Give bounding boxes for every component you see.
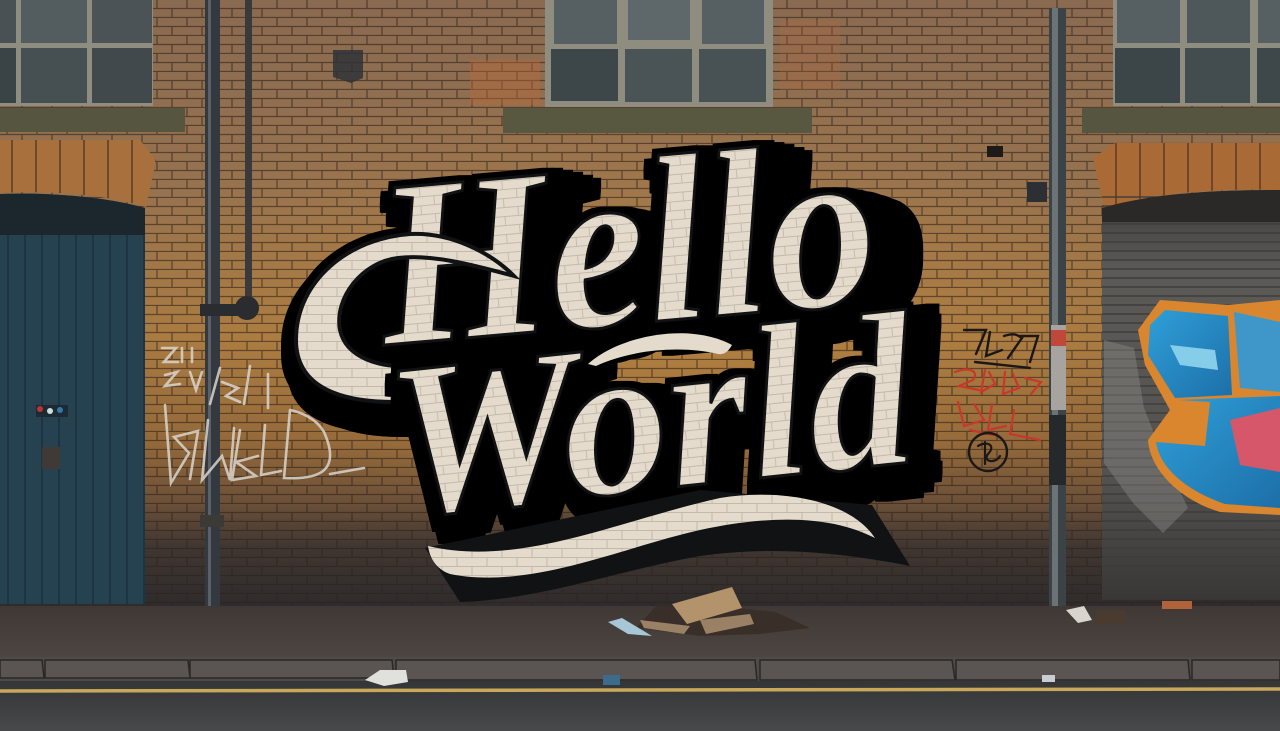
drainpipe: left — [200, 0, 259, 620]
window: top left — [0, 0, 153, 106]
red and black graffiti tag — [955, 330, 1041, 471]
blue door — [0, 194, 145, 604]
window sill: right — [1082, 108, 1280, 133]
litter — [365, 601, 1192, 686]
brick arch: left — [0, 140, 156, 207]
word: Hello: Hello — [365, 91, 886, 397]
small swash between words — [588, 333, 732, 366]
window: centre — [545, 0, 773, 107]
brick arch: right — [1093, 143, 1280, 208]
underline swash — [425, 490, 910, 602]
drainpipe: right with stickers — [1049, 8, 1066, 612]
mural: Hello World lettering — [296, 91, 927, 602]
word: World: World — [378, 266, 927, 564]
window sill: left — [0, 108, 185, 132]
yellow road line — [0, 689, 1280, 691]
window sill: centre — [503, 108, 812, 133]
pavement — [0, 606, 1280, 661]
roller shutter with graffiti — [1102, 190, 1280, 600]
white graffiti tag — [162, 348, 364, 483]
rubbish pile — [608, 587, 810, 636]
window: top right — [1113, 0, 1280, 106]
kerb — [0, 657, 1280, 681]
road — [0, 681, 1280, 731]
